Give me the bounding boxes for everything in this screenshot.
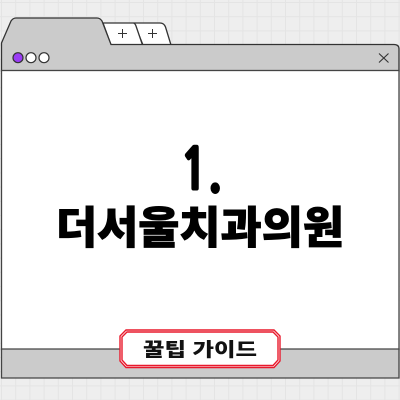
- white control dot 1: [26, 53, 36, 63]
- back tab 1: [103, 23, 142, 45]
- badge inner frame: [122, 332, 278, 366]
- window footer bar: [2, 349, 399, 378]
- title name: 더서울치과의원: [56, 204, 344, 253]
- badge label: 꿀팁 가이드: [143, 339, 257, 360]
- badge: [120, 330, 280, 368]
- white control dot 2: [39, 53, 49, 63]
- back tab 2: [134, 23, 171, 45]
- window title bar: [2, 18, 399, 71]
- purple control dot: [13, 53, 23, 63]
- badge frame: [120, 330, 280, 368]
- close icon: [379, 54, 388, 62]
- tab plus icon 2: [148, 29, 157, 38]
- window content area: [2, 70, 399, 350]
- tab plus icon 1: [118, 29, 127, 38]
- title number: 1.: [180, 142, 222, 198]
